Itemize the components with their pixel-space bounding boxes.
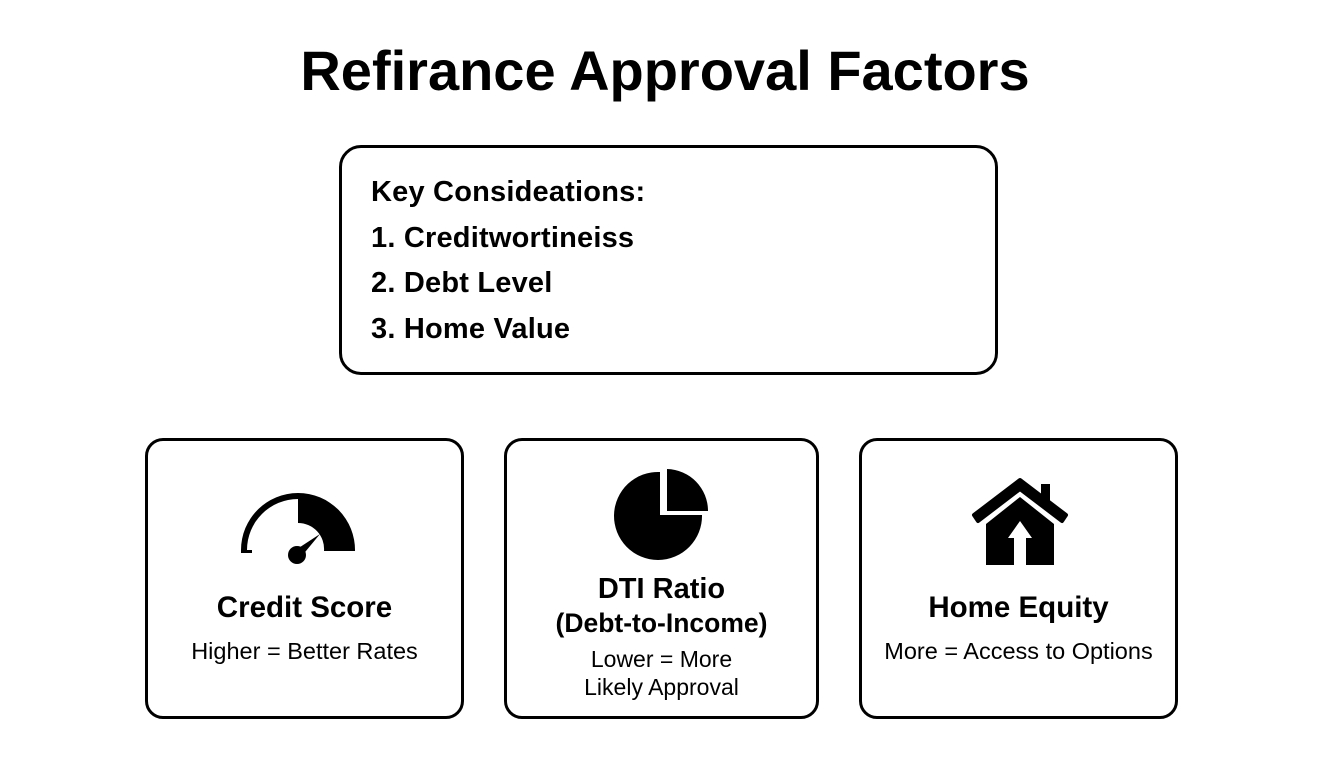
label: Home Equity — [928, 591, 1109, 624]
card: home equity — [859, 438, 1178, 719]
icon: gauge — [241, 493, 355, 564]
list text: 1. Creditwortineiss — [371, 222, 634, 254]
description: Likely Approval — [584, 674, 739, 700]
icon: pie chart — [614, 469, 708, 560]
description: Higher = Better Rates — [191, 638, 418, 664]
description — [584, 646, 739, 700]
label: Credit Score — [217, 591, 392, 624]
card: credit score — [145, 438, 464, 719]
list text: Key Consideations: — [371, 176, 645, 208]
description: Lower = More — [591, 646, 732, 672]
panel: key considerations — [339, 145, 998, 375]
label — [556, 573, 767, 638]
card: DTI ratio — [504, 438, 819, 719]
description: More = Access to Options — [884, 638, 1153, 664]
label: (Debt-to-Income) — [556, 608, 767, 638]
list text: 2. Debt Level — [371, 267, 552, 299]
icon: house — [972, 478, 1068, 565]
title: Refirance Approval Factors — [300, 39, 1030, 102]
label: DTI Ratio — [598, 573, 725, 605]
list text: 3. Home Value — [371, 312, 570, 344]
list text — [371, 176, 645, 344]
